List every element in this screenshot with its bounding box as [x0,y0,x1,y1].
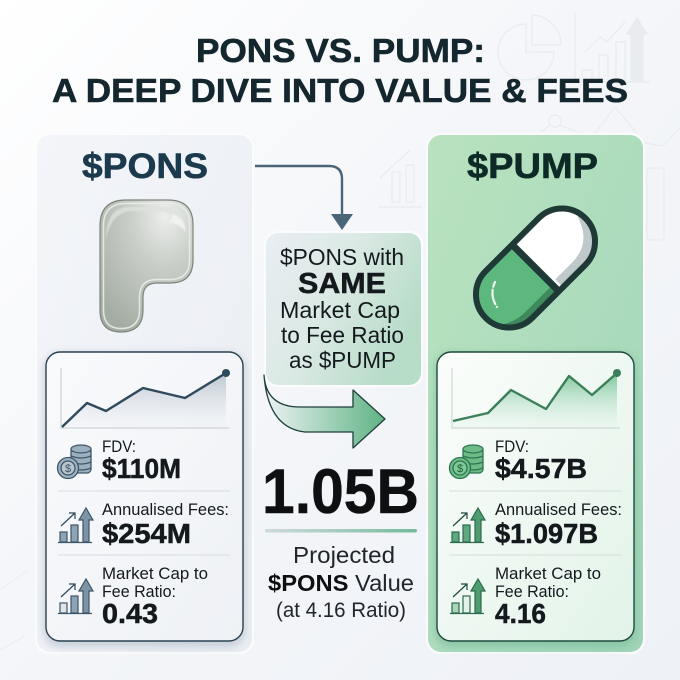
panel: $PONS [35,133,254,654]
metric: FDV: FDV: [495,437,529,456]
metric: market cap to fee ratio: Fee Ratio: [102,582,176,601]
arrow: callout to result [264,375,385,448]
metric: annualised fees: Annualised Fees: [102,500,229,519]
result: projected value: (at 4.16 Ratio) [276,599,406,622]
icon: growth chart [58,508,93,542]
metric: market cap to fee ratio: Market Cap to [495,564,601,583]
heading: $PUMP: $PUMP [467,147,598,186]
line chart: $PONS [61,368,230,428]
metric: market cap to fee ratio: 0.43 [102,598,158,629]
icon: growth chart [58,579,93,614]
metric: annualised fees: Annualised Fees: [495,500,622,519]
callout: same ratio: SAME [298,268,386,300]
metric: market cap to fee ratio [102,564,208,629]
callout: same ratio: Market Cap [280,297,400,323]
metric: FDV [102,437,181,484]
metric: FDV: $110M [102,453,181,484]
arrow: $PONS to callout [255,166,353,230]
icon: coins [58,445,91,478]
card: $PUMP metrics [437,352,634,641]
metric: annualised fees [102,500,229,549]
metric: FDV: $4.57B [495,453,587,484]
metric: FDV: FDV: [102,437,136,456]
result: projected value: $PONS Value [268,570,414,596]
title [52,32,628,109]
callout: same ratio: $PONS with [280,244,404,270]
callout: same ratio [264,231,423,387]
metric: FDV [495,437,587,484]
icon: coins: $ [457,463,463,475]
panel: $PUMP [426,133,645,654]
icon: growth chart [450,579,485,614]
card: $PONS metrics [46,352,243,641]
title: PONS VS. PUMP: [196,32,485,69]
line chart: $PUMP [452,368,621,428]
metric: market cap to fee ratio: Market Cap to [102,564,208,583]
icon: glass P logo [100,200,193,332]
result: projected value: Projected [293,542,395,568]
icon: pill capsule [462,195,609,341]
metric: market cap to fee ratio: Fee Ratio: [495,582,569,601]
icon: coins [450,445,483,478]
result: projected value: 1.05B [262,457,419,527]
metric: market cap to fee ratio: 4.16 [495,598,546,629]
heading: $PONS: $PONS [82,147,208,186]
result: projected value [262,457,419,622]
title: A DEEP DIVE INTO VALUE & FEES [52,72,628,109]
metric: market cap to fee ratio [495,564,601,629]
callout: same ratio: to Fee Ratio [281,322,404,348]
metric: annualised fees [495,500,622,549]
icon: coins: $ [65,463,71,475]
metric: annualised fees: $1.097B [495,518,598,549]
icon: growth chart [450,508,485,542]
callout: same ratio: as $PUMP [289,347,396,373]
metric: annualised fees: $254M [102,518,191,549]
